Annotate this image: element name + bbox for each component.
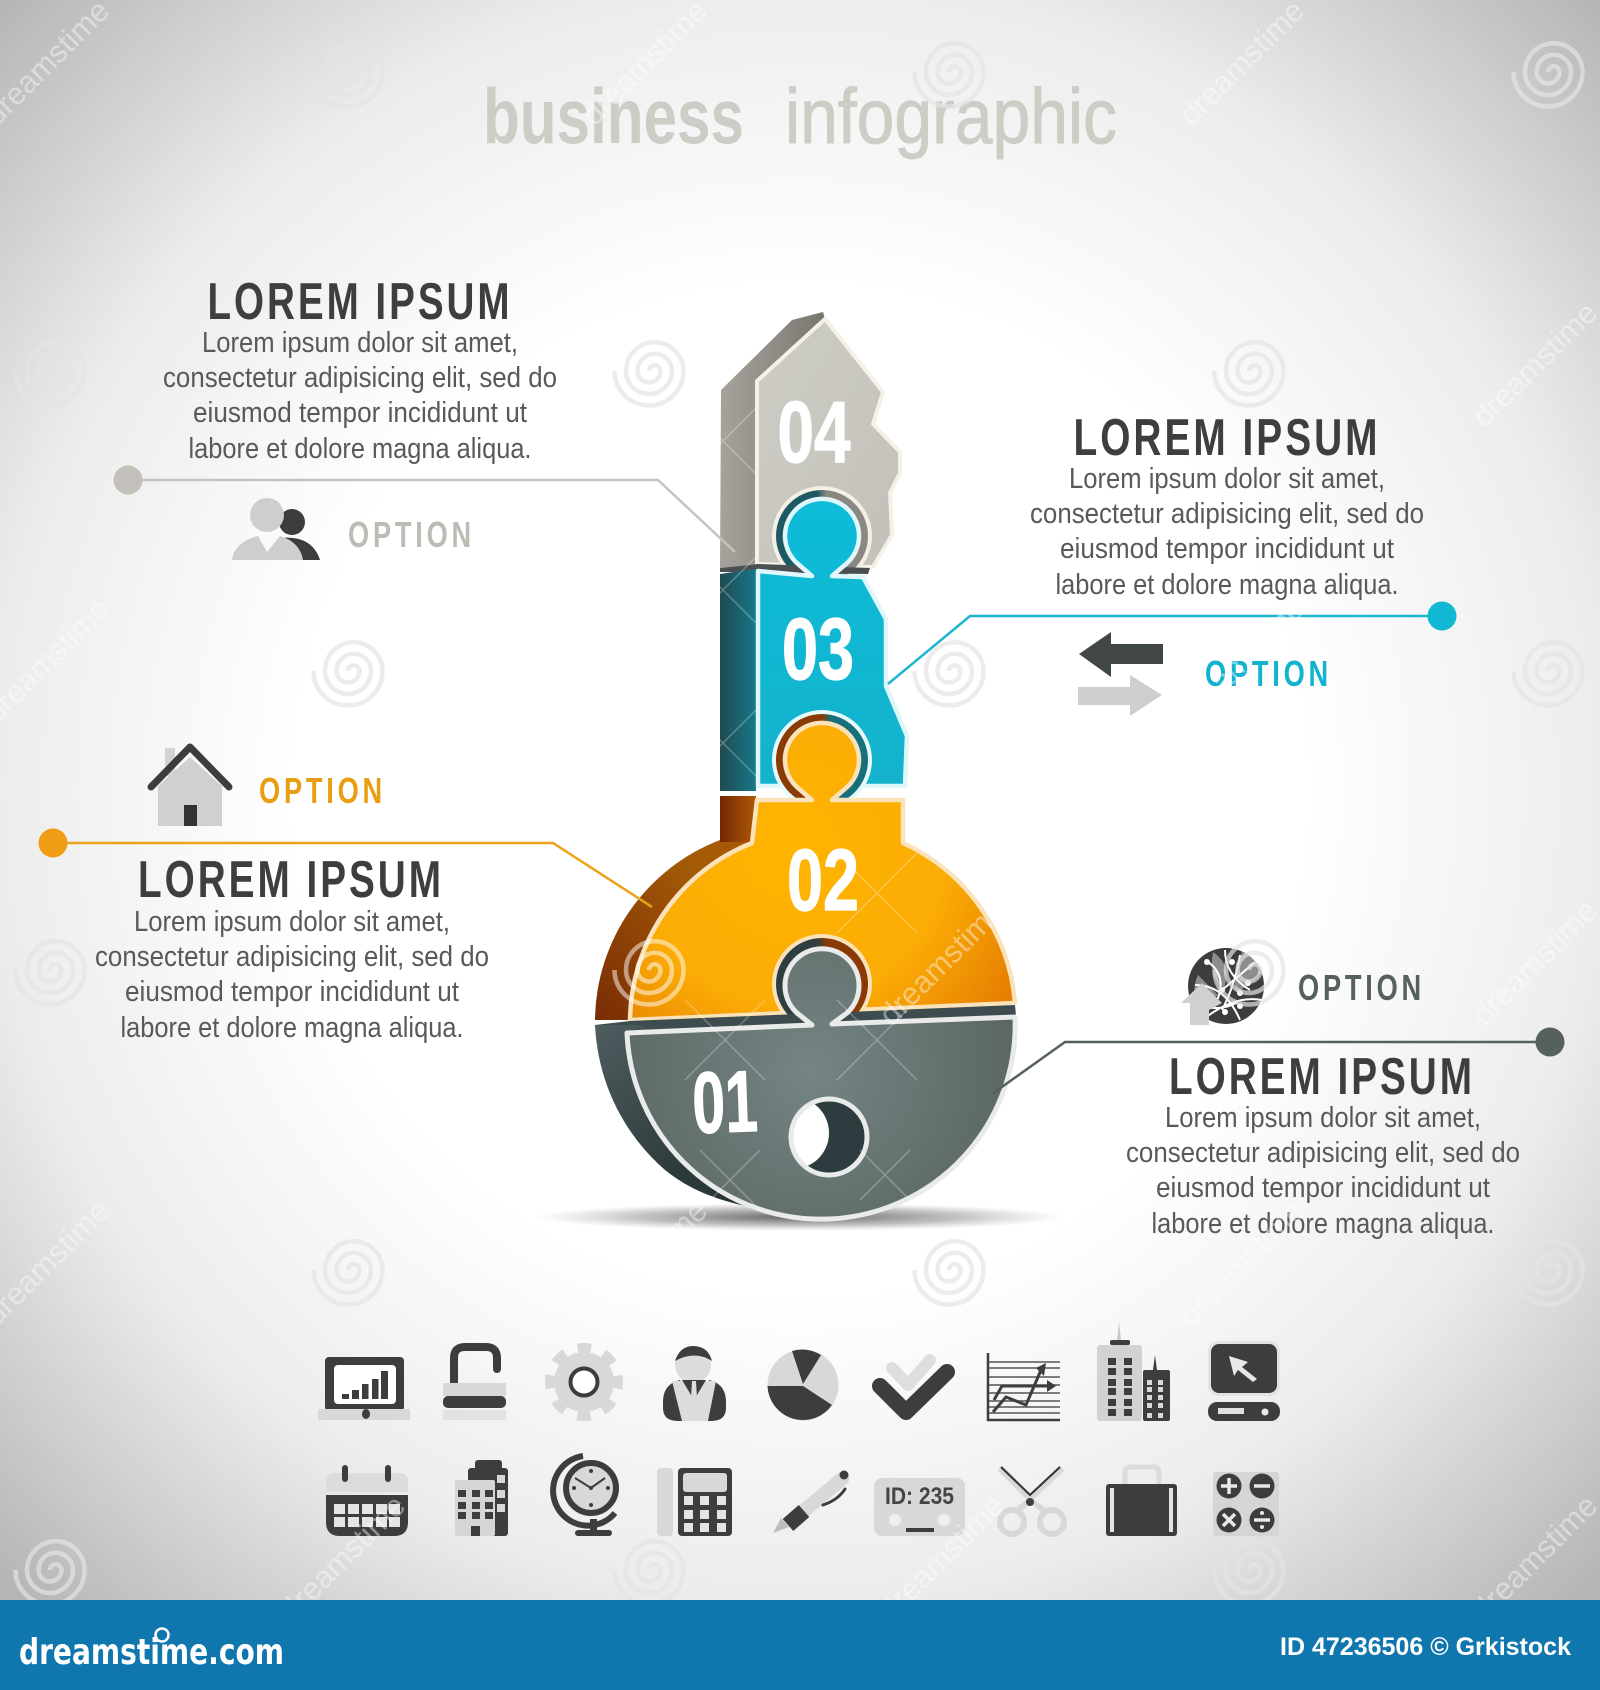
body text: eiusmod tempor incididunt ut <box>1060 533 1394 565</box>
icon: line chart <box>987 1353 1060 1421</box>
watermark layer: dreamstime <box>1172 1193 1311 1332</box>
watermark layer: dreamstime <box>872 295 1011 434</box>
icon: check mark <box>880 1360 947 1412</box>
number 04: 04 <box>778 384 850 481</box>
body text: Lorem ipsum dolor sit amet, <box>1165 1102 1481 1134</box>
icon: computer cursor <box>1208 1341 1280 1421</box>
icon: businessman <box>663 1346 726 1421</box>
icon: math symbols <box>1213 1472 1279 1536</box>
icon row 2 <box>326 1456 1279 1536</box>
puzzle key <box>595 312 1016 1219</box>
title <box>483 72 1117 160</box>
watermark layer: dreamstime <box>872 1488 1011 1627</box>
body text <box>1030 463 1424 601</box>
body text: eiusmod tempor incididunt ut <box>1156 1172 1490 1204</box>
icon: ID card <box>874 1478 965 1536</box>
icon: calendar <box>326 1465 408 1536</box>
number 03: 03 <box>782 601 854 698</box>
body text <box>1126 1102 1520 1240</box>
key hole <box>788 1096 870 1178</box>
title: business <box>483 72 744 160</box>
option label: OPTION <box>348 514 475 555</box>
body text: Lorem ipsum dolor sit amet, <box>134 906 450 938</box>
icon: laptop chart <box>318 1357 410 1420</box>
body text: eiusmod tempor incididunt ut <box>193 397 527 429</box>
icon: globe clock <box>553 1456 616 1536</box>
icon row 1 <box>318 1322 1280 1421</box>
connector <box>114 466 735 552</box>
heading: LOREM IPSUM <box>1074 409 1380 467</box>
body text <box>95 906 489 1044</box>
body text <box>163 327 557 465</box>
callout: block 02 left <box>38 747 652 1044</box>
piece 01 slate <box>595 949 1016 1219</box>
heading: LOREM IPSUM <box>1169 1048 1475 1106</box>
icon: office block <box>455 1460 508 1536</box>
icon: ID card: ID: 235 <box>885 1483 954 1510</box>
icon: gear <box>550 1348 618 1416</box>
watermark layer: dreamstime <box>273 1488 412 1627</box>
icon: briefcase <box>1106 1467 1177 1536</box>
title: infographic <box>785 72 1117 160</box>
connector <box>888 602 1456 684</box>
footer logo: dreamstime.com <box>19 1632 284 1673</box>
watermark layer: dreamstime <box>872 893 1011 1032</box>
body text: consectetur adipisicing elit, sed do <box>1030 498 1424 530</box>
piece 04 grey <box>720 312 900 586</box>
icon: people <box>232 498 320 560</box>
body text: eiusmod tempor incididunt ut <box>125 976 459 1008</box>
body text: Lorem ipsum dolor sit amet, <box>1069 463 1385 495</box>
option label: OPTION <box>259 770 386 811</box>
key shadow <box>535 1203 1065 1231</box>
body text: consectetur adipisicing elit, sed do <box>95 941 489 973</box>
callout: block 04 top left <box>114 273 735 560</box>
callout: block 01 right bottom <box>992 948 1564 1240</box>
body text: Lorem ipsum dolor sit amet, <box>202 327 518 359</box>
piece 02 orange <box>595 723 1015 1034</box>
body text: consectetur adipisicing elit, sed do <box>1126 1137 1520 1169</box>
icon: scissors <box>1000 1467 1064 1534</box>
icon: open lock <box>443 1347 506 1420</box>
icon: head with network <box>1181 948 1264 1025</box>
connector <box>38 828 652 907</box>
icon: exchange arrows <box>1078 632 1163 716</box>
body text: consectetur adipisicing elit, sed do <box>163 362 557 394</box>
body text: labore et dolore magna aliqua. <box>1056 569 1398 601</box>
footer band <box>0 1600 1600 1690</box>
footer credit: ID 47236506 © Grkistock <box>1280 1633 1571 1661</box>
option label: OPTION <box>1205 653 1332 694</box>
number 01: 01 <box>691 1053 759 1152</box>
watermark layer: dreamstime <box>575 1193 714 1332</box>
watermark layer: dreamstime <box>1172 591 1311 730</box>
connector <box>992 1028 1564 1094</box>
icon: pie chart <box>768 1349 838 1420</box>
icon: house <box>151 747 229 826</box>
icon: office towers <box>1097 1322 1170 1421</box>
body text: labore et dolore magna aliqua. <box>188 433 532 465</box>
number 02: 02 <box>787 832 859 929</box>
icon: calculator <box>657 1468 732 1536</box>
heading: LOREM IPSUM <box>138 851 444 909</box>
heading: LOREM IPSUM <box>208 273 512 331</box>
callout: block 03 right <box>888 409 1456 716</box>
body text: labore et dolore magna aliqua. <box>1152 1208 1494 1240</box>
option label: OPTION <box>1298 967 1425 1008</box>
watermark layer: dreamstime <box>575 591 714 730</box>
body text: labore et dolore magna aliqua. <box>120 1012 464 1044</box>
piece 03 teal <box>720 499 907 810</box>
icon: pen <box>773 1470 848 1533</box>
